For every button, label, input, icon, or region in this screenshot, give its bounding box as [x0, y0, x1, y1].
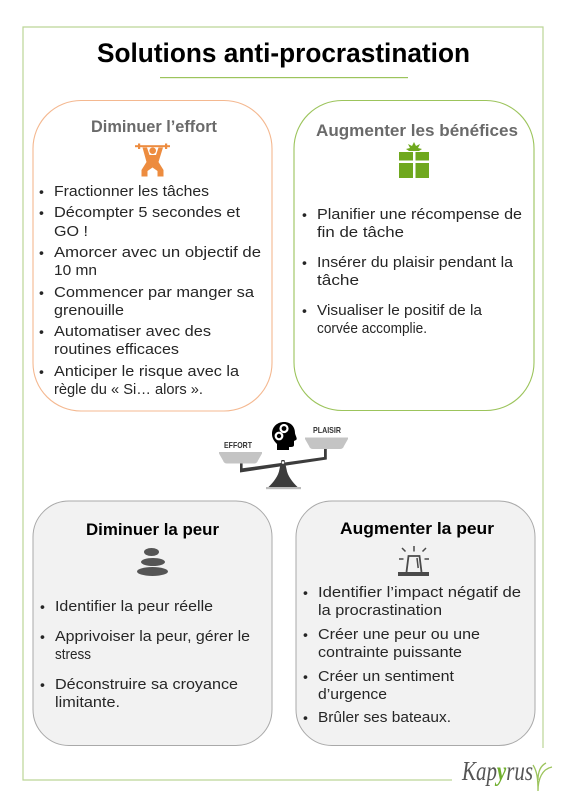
- bullet list: 10 mn: [54, 262, 97, 279]
- bullet list: •: [40, 676, 45, 692]
- right pan: [305, 438, 348, 449]
- bullet list: Décompter 5 secondes et: [54, 204, 241, 221]
- balance illustration: [219, 422, 348, 489]
- label: plaisir: PLAISIR: [313, 425, 341, 435]
- icon: stacked stones: [137, 548, 168, 576]
- bullet list: Visualiser le positif de la: [317, 302, 483, 319]
- panel: augmenter les bénéfices: [294, 100, 534, 410]
- bullet list: GO !: [54, 223, 88, 240]
- bullet list: limitante.: [55, 694, 120, 711]
- bullet list: Créer un sentiment: [318, 668, 455, 685]
- bullet list: •: [39, 184, 44, 200]
- balance base: [268, 460, 298, 487]
- heading: Diminuer la peur: [86, 520, 219, 539]
- bullet list: Commencer par manger sa: [54, 284, 255, 301]
- icon: siren: [398, 546, 429, 574]
- title: Solutions anti-procrastination: [97, 38, 470, 68]
- icon: gift: [399, 142, 429, 178]
- bullet list: Identifier la peur réelle: [55, 598, 213, 615]
- bullet list: Identifier l’impact négatif de: [318, 584, 521, 601]
- icon: head with gears: [272, 422, 297, 450]
- bullet list: Insérer du plaisir pendant la: [317, 254, 514, 271]
- heading: Diminuer l’effort: [91, 117, 217, 136]
- bullet list: Planifier une récompense de: [317, 206, 522, 223]
- bullet list: fin de tâche: [317, 224, 404, 241]
- bullet list: •: [302, 206, 307, 222]
- bullet list: tâche: [317, 272, 359, 289]
- bullet list: •: [303, 584, 308, 600]
- bullet list: •: [303, 668, 308, 684]
- bullet list: •: [39, 364, 44, 380]
- bullet list: •: [303, 710, 308, 726]
- bullet list: •: [39, 204, 44, 220]
- bullet list: Fractionner les tâches: [54, 183, 209, 200]
- logo: Kapyrus: Kapyrus: [461, 756, 533, 786]
- bullet list: règle du « Si… alors ».: [54, 381, 203, 398]
- bullet list: [302, 206, 522, 337]
- bullet list: d’urgence: [318, 686, 387, 703]
- bullet list: Créer une peur ou une: [318, 626, 480, 643]
- bullet list: [39, 183, 261, 398]
- title underline: [160, 77, 408, 78]
- bullet list: Anticiper le risque avec la: [54, 363, 240, 380]
- bullet list: •: [303, 626, 308, 642]
- bullet list: [40, 598, 250, 711]
- bullet list: •: [39, 244, 44, 260]
- heading: Augmenter la peur: [340, 519, 494, 538]
- bullet list: routines efficaces: [54, 341, 179, 358]
- bullet list: Brûler ses bateaux.: [318, 709, 451, 726]
- bullet list: Automatiser avec des: [54, 323, 211, 340]
- icon: weightlifter: [135, 144, 170, 176]
- bullet list: stress: [55, 646, 91, 663]
- panel: augmenter la peur: [296, 501, 535, 746]
- bullet list: corvée accomplie.: [317, 320, 427, 337]
- panel: diminuer l'effort: [33, 100, 272, 411]
- heading: Augmenter les bénéfices: [316, 121, 518, 140]
- bullet list: Apprivoiser la peur, gérer le: [55, 628, 250, 645]
- balance beam: [240, 448, 327, 472]
- bullet list: [303, 584, 521, 726]
- bullet list: grenouille: [54, 302, 124, 319]
- bullet list: •: [302, 302, 307, 318]
- bullet list: contrainte puissante: [318, 644, 462, 661]
- label: effort: EFFORT: [224, 440, 253, 450]
- bullet list: la procrastination: [318, 602, 442, 619]
- bullet list: •: [302, 254, 307, 270]
- panel: diminuer la peur: [33, 501, 272, 746]
- bullet list: •: [40, 628, 45, 644]
- bullet list: Amorcer avec un objectif de: [54, 244, 261, 261]
- bullet list: •: [39, 324, 44, 340]
- left pan: [219, 452, 262, 464]
- bullet list: •: [39, 284, 44, 300]
- bullet list: Déconstruire sa croyance: [55, 676, 238, 693]
- bullet list: •: [40, 598, 45, 614]
